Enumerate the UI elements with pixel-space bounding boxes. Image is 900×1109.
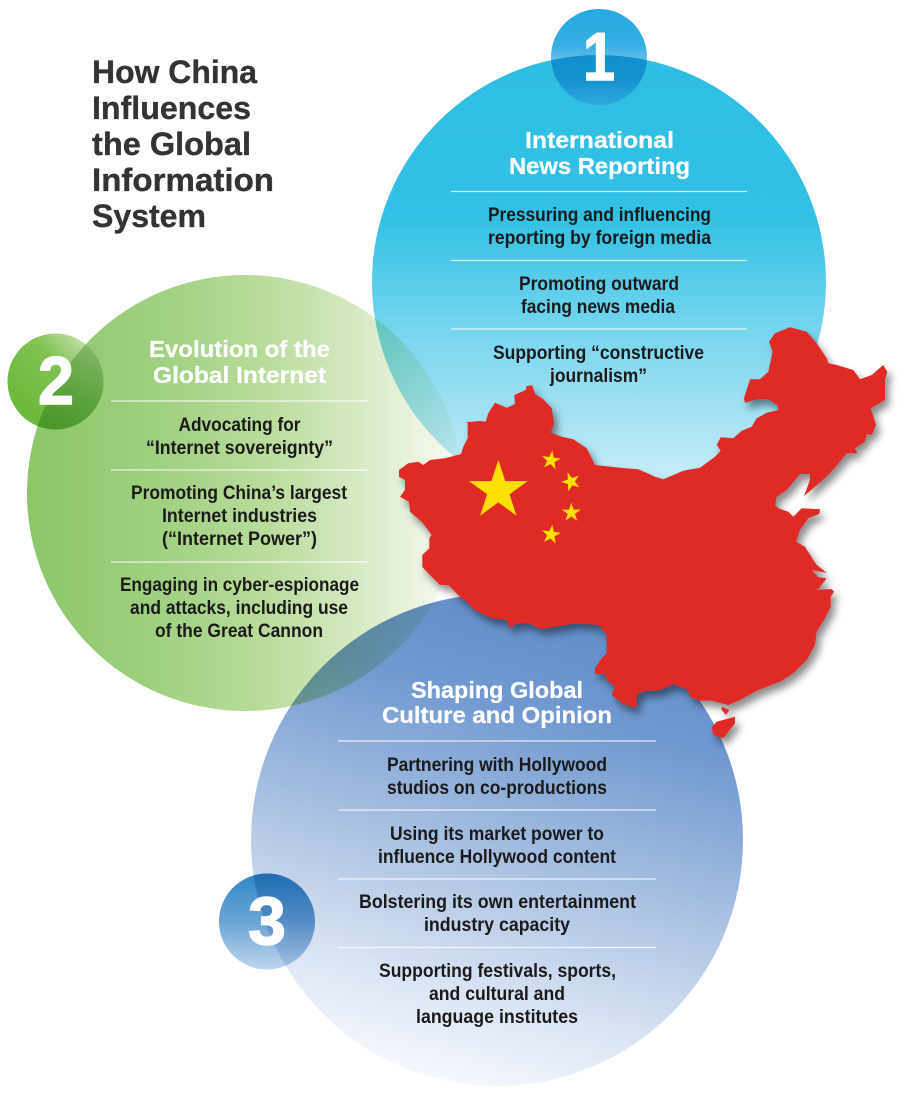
badge: number 2: 2 <box>38 343 74 419</box>
text: internet power: Internet industries <box>162 506 317 527</box>
text: entertainment capacity <box>359 892 637 936</box>
text: entertainment capacity: industry capacity <box>424 915 570 936</box>
star: large <box>469 460 528 516</box>
heading: evolution of the global internet: Global Internet <box>153 362 326 388</box>
heading: international news reporting: News Reporting <box>509 153 690 179</box>
text: outward facing media: Promoting outward <box>519 274 679 295</box>
text: hollywood co-productions: Partnering with Hollywood <box>387 755 607 776</box>
map of China with flag stars <box>399 327 887 738</box>
text: festivals and institutes: Supporting festivals, sports, <box>379 961 616 982</box>
circle: green <box>27 275 463 711</box>
title <box>92 54 274 234</box>
circle: cyan <box>372 55 826 509</box>
text: entertainment capacity: Bolstering its own entertainment <box>359 892 637 913</box>
heading: shaping global culture and opinion <box>382 677 612 728</box>
text: internet power: Promoting China’s largest <box>131 483 348 504</box>
text: hollywood co-productions <box>387 755 607 799</box>
heading: shaping global culture and opinion: Shaping Global <box>411 677 583 703</box>
badge: number 3 <box>219 874 315 970</box>
text: internet power <box>131 483 348 550</box>
text: internet sovereignty <box>146 415 333 459</box>
text: constructive journalism: journalism” <box>549 366 647 387</box>
text: outward facing media <box>519 274 679 318</box>
panel: evolution of the global internet <box>8 275 463 711</box>
flag stars <box>469 449 583 544</box>
text: internet sovereignty: “Internet sovereignty” <box>146 438 333 459</box>
badge: number 2 <box>8 334 104 430</box>
text: foreign media <box>488 205 711 249</box>
title: the Global <box>92 126 251 162</box>
text: market power: influence Hollywood content <box>378 847 617 868</box>
heading: evolution of the global internet <box>149 336 330 388</box>
title: How China <box>92 54 257 90</box>
circle: blue <box>251 594 743 1086</box>
heading: international news reporting <box>509 127 690 179</box>
text: market power: Using its market power to <box>390 824 604 845</box>
panel: international news reporting <box>372 9 826 509</box>
star: small 3 <box>562 503 581 521</box>
text: internet sovereignty: Advocating for <box>178 415 301 436</box>
badge: number 1 <box>551 9 647 105</box>
panel: shaping global culture and opinion <box>219 594 743 1086</box>
text: outward facing media: facing news media <box>521 297 675 318</box>
map outline <box>399 327 887 738</box>
text: festivals and institutes: language institutes <box>416 1007 578 1028</box>
text: hollywood co-productions: studios on co-productions <box>387 778 607 799</box>
badge: number 3: 3 <box>248 883 286 959</box>
text: constructive journalism: Supporting “constructive <box>493 343 704 364</box>
text: internet power: (“Internet Power”) <box>162 529 317 550</box>
text: festivals and institutes <box>379 961 616 1028</box>
text: cyber-espionage <box>120 575 359 642</box>
title: Influences <box>92 90 251 126</box>
star: small 1 <box>540 449 562 470</box>
title: System <box>92 198 206 234</box>
heading: evolution of the global internet: Evolution of the <box>149 336 330 362</box>
text: cyber-espionage: and attacks, including use <box>130 598 348 619</box>
text: cyber-espionage: of the Great Cannon <box>155 621 323 642</box>
text: festivals and institutes: and cultural and <box>429 984 565 1005</box>
star: small 2 <box>559 469 583 493</box>
text: market power <box>378 824 617 868</box>
badge: number 1: 1 <box>583 19 615 95</box>
text: foreign media: Pressuring and influencing <box>488 205 711 226</box>
heading: international news reporting: International <box>525 127 674 153</box>
text: cyber-espionage: Engaging in cyber-espionage <box>120 575 359 596</box>
heading: shaping global culture and opinion: Culture and Opinion <box>382 702 612 728</box>
text: foreign media: reporting by foreign media <box>488 228 711 249</box>
title: Information <box>92 162 274 198</box>
star: small 4 <box>540 523 562 544</box>
text: constructive journalism <box>493 343 704 387</box>
